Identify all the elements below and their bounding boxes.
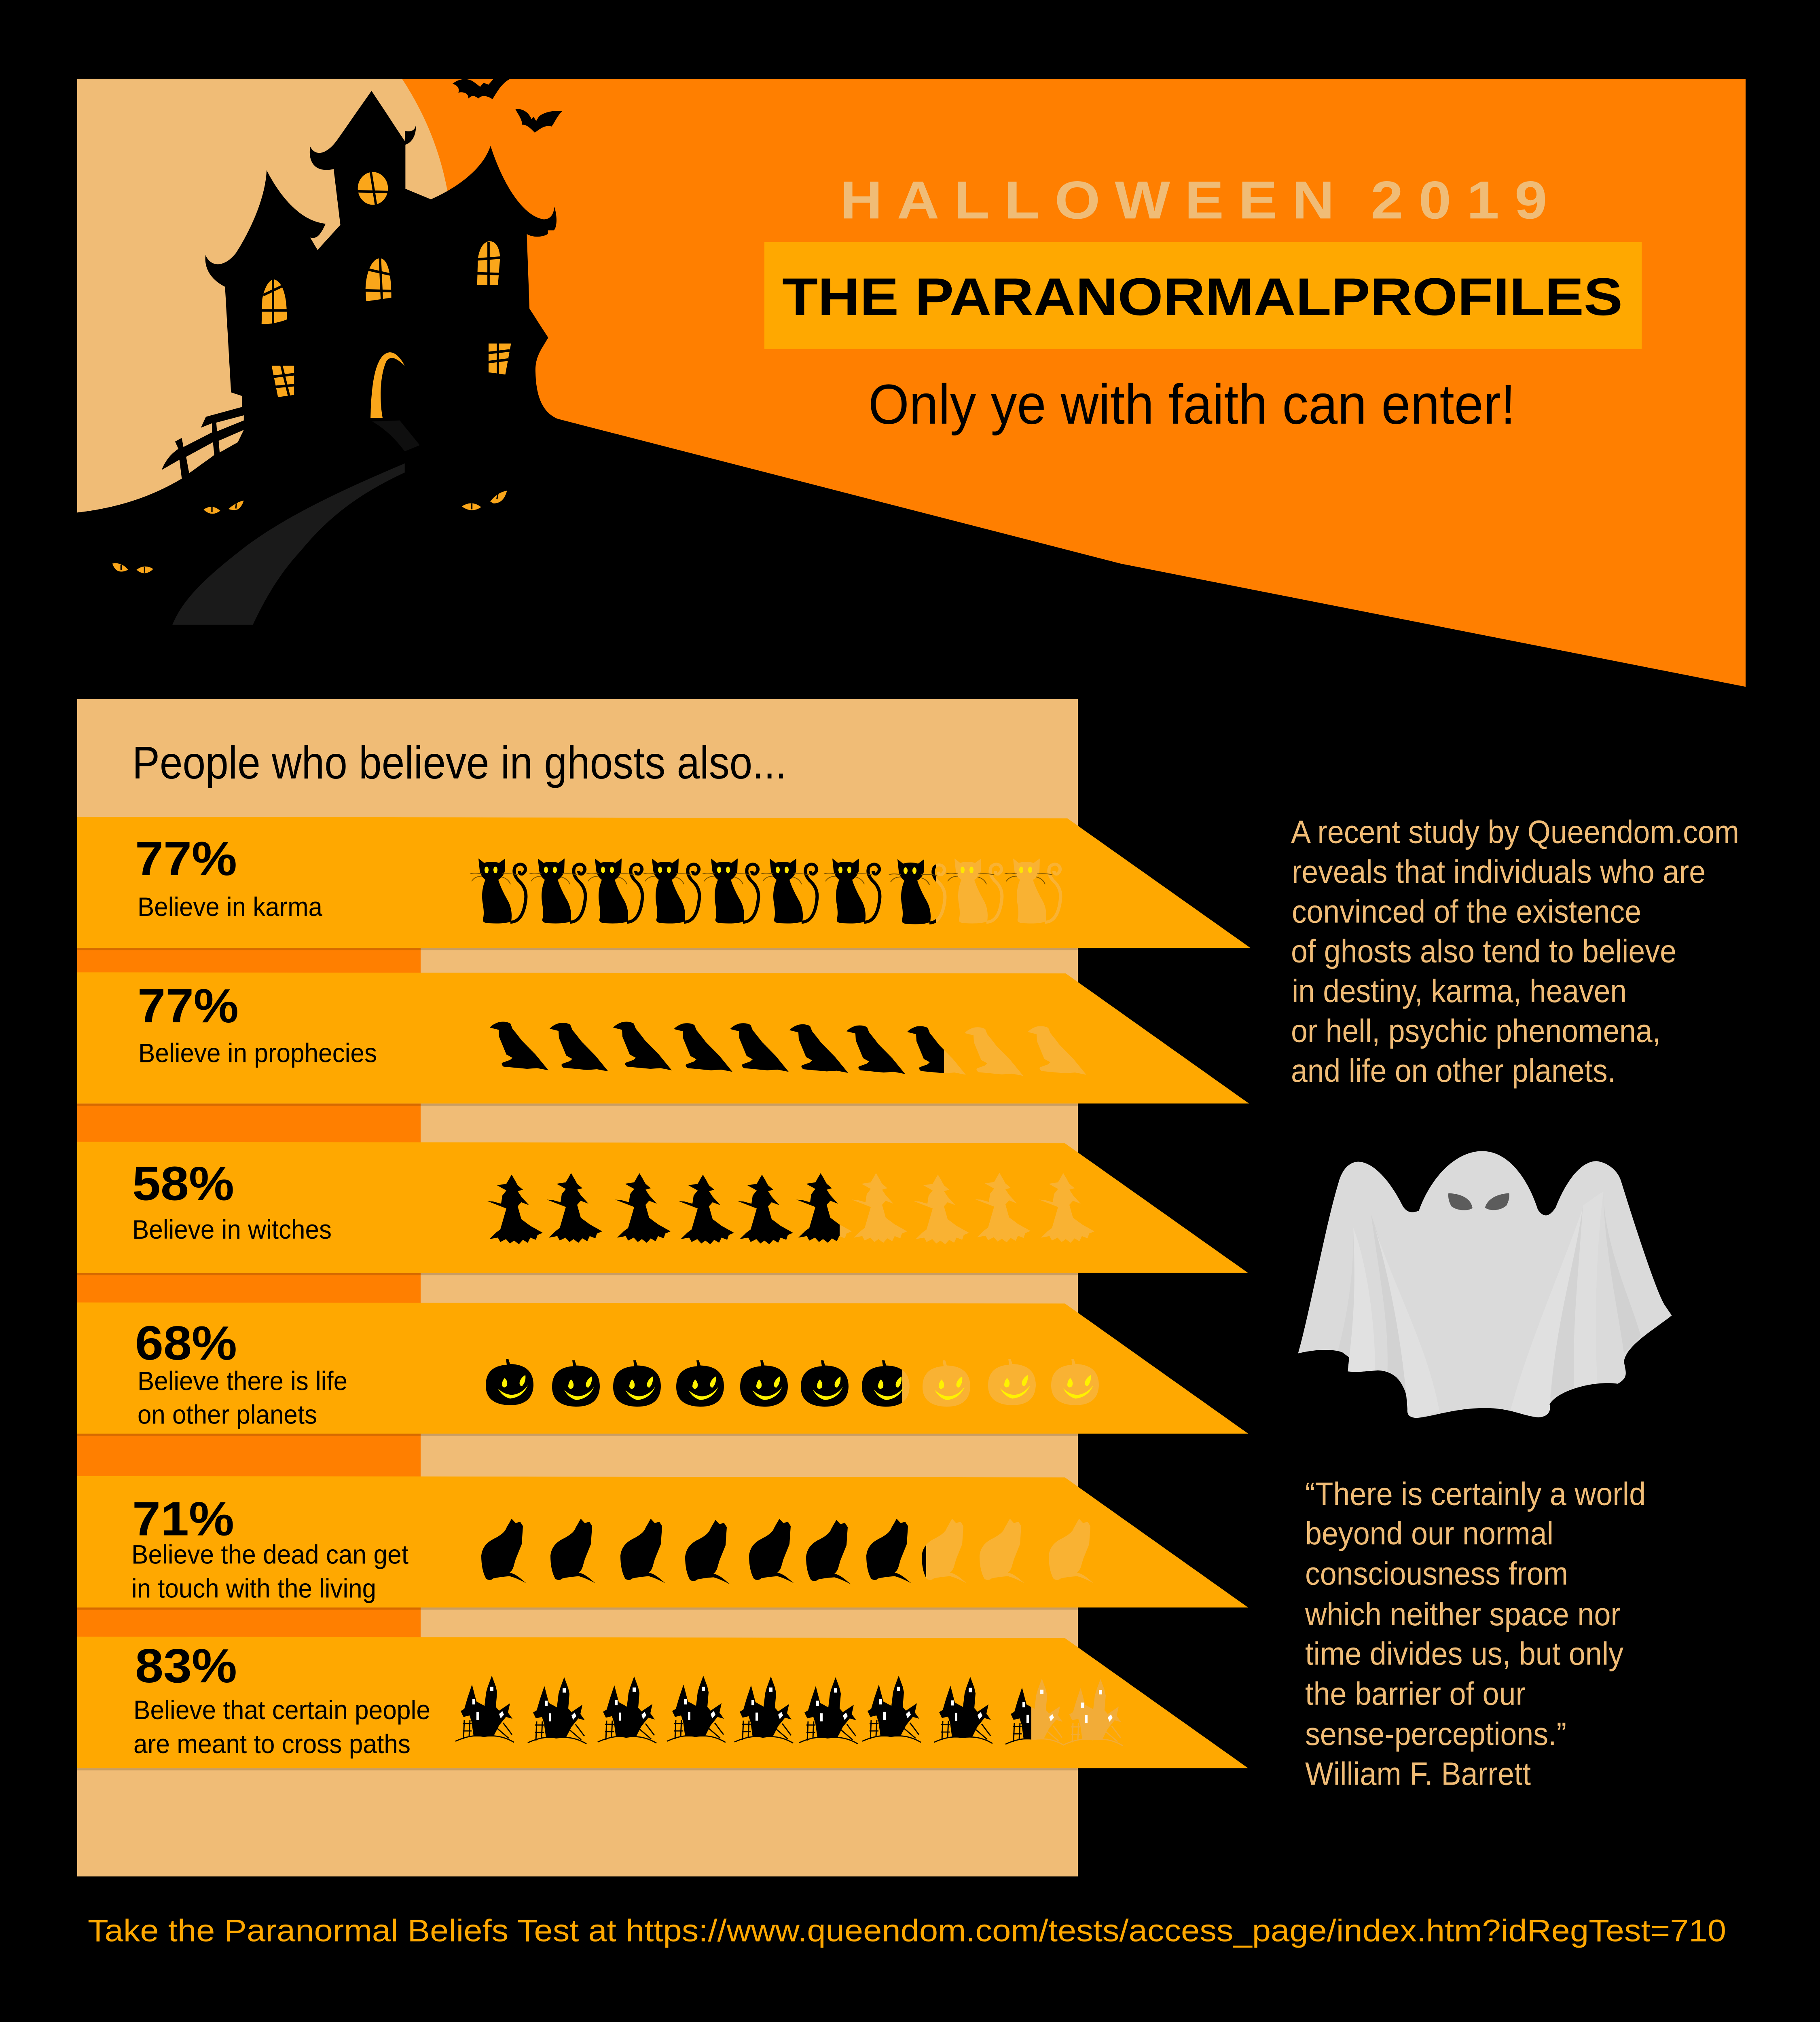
row: 68% believe there is life on other planets: on other planets	[138, 1400, 317, 1430]
row: 71% believe the dead can get in touch with the living: Believe the dead can get	[131, 1540, 408, 1569]
text block: study summary: reveals that individuals who are	[1292, 854, 1706, 890]
icons: witches	[487, 1173, 1094, 1244]
text block: study summary: or hell, psychic phenomena,	[1291, 1013, 1661, 1049]
illustration: haunted house scene	[77, 79, 599, 645]
quote: William F. Barrett: beyond our normal	[1305, 1515, 1553, 1551]
row: 68% believe there is life on other planets: 68%	[135, 1316, 237, 1370]
row: 58% believe in witches: Believe in witches	[132, 1215, 332, 1244]
moon	[77, 79, 448, 512]
ghost eyes	[1448, 1193, 1509, 1210]
panel heading: People who believe in ghosts also...	[132, 738, 787, 789]
quote: William F. Barrett: time divides us, but only	[1305, 1635, 1623, 1671]
panel: header banner	[364, 79, 1746, 687]
icons: sitting cats	[481, 1519, 1094, 1584]
row: 83% believe certain people are meant to cross paths	[77, 1637, 1248, 1768]
quote: William F. Barrett: sense-perceptions.”	[1305, 1715, 1566, 1752]
icons: black cats	[470, 859, 1060, 924]
quote: William F. Barrett: the barrier of our	[1305, 1675, 1526, 1712]
panel: beliefs background	[77, 699, 1078, 1876]
house silhouette	[77, 91, 599, 645]
eyes in the dark	[112, 491, 507, 573]
heading: Halloween 2019: HALLOWEEN	[840, 170, 1380, 230]
text block: study summary	[1291, 814, 1739, 1089]
row: 77% believe in prophecies: 77%	[138, 979, 239, 1033]
row: 77% believe in karma	[77, 817, 1251, 948]
footer call to action: Take the Paranormal Beliefs Test at https://www.queendom.com/tests/access_page/index.htm?idRegTest=710	[88, 1913, 1726, 1948]
text block: study summary: of ghosts also tend to believe	[1291, 933, 1676, 969]
row: 77% believe in karma: Believe in karma	[138, 892, 323, 922]
row: 58% believe in witches	[77, 1142, 1248, 1273]
fence gaps	[186, 415, 244, 473]
quote: William F. Barrett: William F. Barrett	[1305, 1756, 1531, 1791]
row: 83% believe certain people are meant to cross paths: are meant to cross paths	[133, 1729, 411, 1759]
quote: William F. Barrett	[1305, 1476, 1646, 1791]
icons: haunted houses	[455, 1676, 1123, 1746]
row: 71% believe the dead can get in touch with the living: in touch with the living	[131, 1574, 376, 1603]
row: 77% believe in karma: 77%	[135, 832, 237, 886]
steps	[372, 421, 420, 451]
row: 83% believe certain people are meant to cross paths: Believe that certain people	[133, 1695, 430, 1725]
subtitle: Only ye with faith can enter!	[868, 373, 1515, 436]
text block: study summary: in destiny, karma, heaven	[1292, 973, 1627, 1009]
text block: study summary: and life on other planets.	[1291, 1053, 1616, 1089]
row: 71% believe the dead can get in touch with the living	[77, 1476, 1248, 1607]
title band	[764, 242, 1642, 349]
path to door	[172, 463, 405, 625]
house windows	[262, 172, 511, 397]
row: 77% believe in prophecies: Believe in prophecies	[138, 1038, 377, 1068]
row: 71% believe the dead can get in touch with the living: 71%	[132, 1492, 234, 1546]
row: 77% believe in prophecies	[77, 972, 1249, 1104]
window mullions	[260, 170, 510, 396]
quote: William F. Barrett: “There is certainly a world	[1305, 1476, 1646, 1512]
door	[370, 352, 405, 418]
icons: crows	[490, 1022, 1086, 1076]
ribbon shadows	[77, 948, 1078, 1770]
illustration: ghost	[1298, 1151, 1672, 1418]
quote: William F. Barrett: which neither space nor	[1305, 1596, 1621, 1632]
orange connector strips	[77, 948, 421, 1637]
quote: William F. Barrett: consciousness from	[1305, 1555, 1568, 1592]
row: 68% believe there is life on other planets	[77, 1303, 1248, 1434]
heading: Halloween 2019: 2019	[1371, 170, 1563, 230]
icons: pumpkins	[486, 1359, 1099, 1407]
text block: study summary: A recent study by Queendom.com	[1291, 814, 1739, 850]
row: 58% believe in witches: 58%	[132, 1157, 234, 1210]
title band: THE PARANORMALPROFILES	[782, 267, 1623, 327]
text block: study summary: convinced of the existence	[1292, 893, 1641, 929]
icon: bats	[452, 79, 562, 133]
row: 68% believe there is life on other planets: Believe there is life	[138, 1366, 347, 1396]
row: 83% believe certain people are meant to cross paths: 83%	[135, 1639, 237, 1693]
